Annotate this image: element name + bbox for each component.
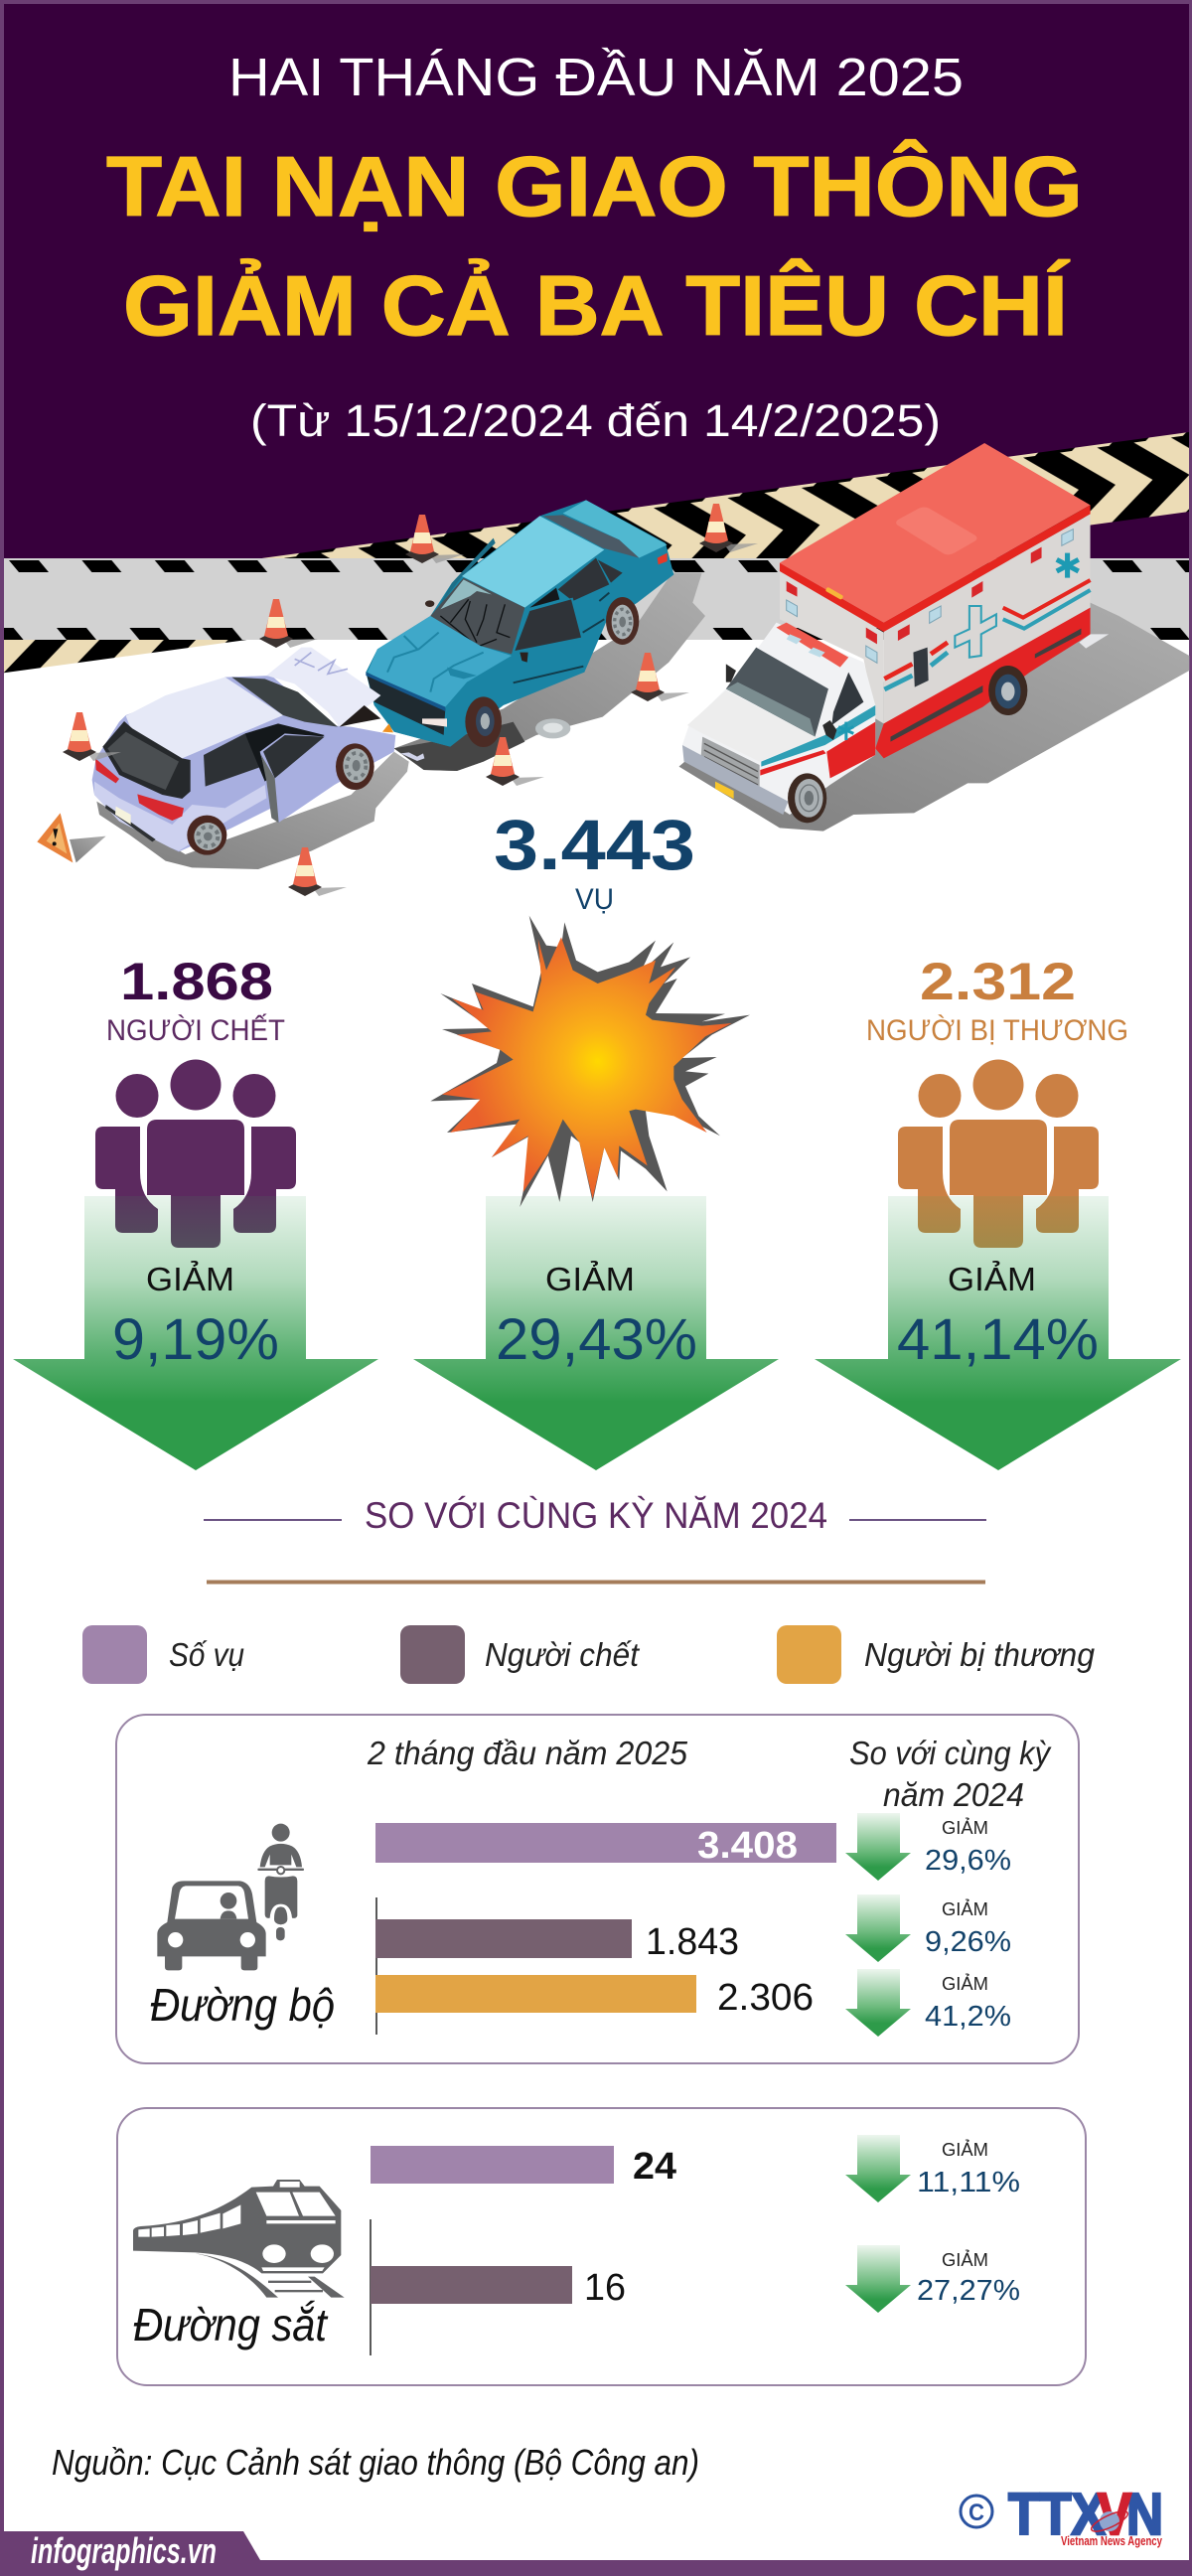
logo: TTXVN: N bbox=[1126, 2482, 1163, 2547]
legend: Người chết bbox=[485, 1636, 641, 1673]
traffic cones behind cars bbox=[259, 504, 758, 648]
footer: infographics.vn bbox=[31, 2530, 217, 2571]
icon: car and scooter bbox=[157, 1824, 304, 1970]
logo: TTXVN bbox=[961, 2482, 1163, 2548]
bar: road injured bbox=[375, 1975, 814, 2019]
arrow labels: deaths bbox=[112, 1261, 279, 1372]
header banner bbox=[4, 4, 1189, 558]
stat: injured count: 2.312 bbox=[920, 953, 1076, 1011]
traffic cones in front bbox=[63, 653, 689, 896]
arrow labels: deaths: 9,19% bbox=[112, 1307, 279, 1372]
stat: injured count: NGƯỜI BỊ THƯƠNG bbox=[866, 1014, 1128, 1047]
footer bbox=[0, 2530, 1192, 2576]
legend: Người bị thương bbox=[864, 1636, 1096, 1673]
logo: TTXVN: TTX bbox=[1008, 2482, 1106, 2547]
change: road accidents: 29,6% bbox=[925, 1845, 1011, 1877]
stat: accidents count: 3.443 bbox=[494, 807, 695, 885]
legend bbox=[82, 1625, 1096, 1684]
title: main heading: TAI NẠN GIAO THÔNG bbox=[106, 139, 1083, 234]
icon: train bbox=[133, 2180, 345, 2298]
bar: road injured: 2.306 bbox=[717, 1977, 814, 2019]
change: road deaths: 9,26% bbox=[925, 1926, 1011, 1958]
illustration: blue car bbox=[366, 500, 705, 771]
column headers bbox=[367, 1735, 1052, 1813]
stat: accidents count bbox=[494, 807, 695, 916]
change: road accidents bbox=[845, 1813, 1011, 1881]
comparison heading: SO VỚI CÙNG KỲ NĂM 2024 bbox=[365, 1495, 827, 1536]
column headers: 2 tháng đầu năm 2025 bbox=[367, 1735, 688, 1771]
change: road deaths: GIẢM bbox=[942, 1898, 988, 1919]
title: main heading: GIẢM CẢ BA TIÊU CHÍ bbox=[123, 258, 1071, 354]
change: road deaths bbox=[845, 1894, 1011, 1962]
change: road injured: 41,2% bbox=[925, 2001, 1011, 2033]
panel: rail bbox=[117, 2108, 1086, 2385]
logo: TTXVN: V bbox=[1098, 2482, 1131, 2547]
bar: rail deaths: 16 bbox=[584, 2267, 626, 2309]
stat: accidents count: VỤ bbox=[575, 883, 614, 916]
icon: people, injured bbox=[898, 1059, 1099, 1248]
arrow labels: injured: 41,14% bbox=[897, 1307, 1099, 1372]
legend: Số vụ bbox=[169, 1636, 244, 1673]
illustration: white car bbox=[37, 648, 409, 869]
change: rail deaths bbox=[845, 2245, 1020, 2313]
arrow labels: accidents: GIẢM bbox=[545, 1261, 635, 1297]
arrow labels: injured: GIẢM bbox=[948, 1261, 1036, 1297]
stat: deaths count: NGƯỜI CHẾT bbox=[106, 1013, 285, 1047]
bar: road deaths bbox=[375, 1919, 739, 1963]
change: rail deaths: GIẢM bbox=[942, 2249, 988, 2270]
label: road: Đường bộ bbox=[150, 1979, 335, 2031]
arrow labels: accidents: 29,43% bbox=[496, 1307, 697, 1372]
change: rail deaths: 27,27% bbox=[917, 2275, 1020, 2307]
chevron tape bbox=[4, 432, 1189, 673]
icon: people, deaths bbox=[95, 1059, 296, 1248]
arrow: accidents decrease bbox=[413, 1196, 779, 1470]
change: rail accidents: GIẢM bbox=[942, 2139, 988, 2160]
bar: road accidents: 3.408 bbox=[697, 1825, 798, 1867]
source: Nguồn: Cục Cảnh sát giao thông (Bộ Công an) bbox=[52, 2442, 699, 2483]
bar: road accidents bbox=[375, 1823, 836, 1867]
column headers: năm 2024 bbox=[883, 1776, 1024, 1813]
change: road injured bbox=[845, 1969, 1011, 2037]
stat: deaths count: 1.868 bbox=[120, 953, 273, 1011]
arrow: injured decrease bbox=[815, 1196, 1181, 1470]
bar: rail deaths bbox=[371, 2266, 626, 2309]
panel: road bbox=[116, 1715, 1079, 2063]
arrow labels: accidents bbox=[496, 1261, 697, 1372]
title: main heading bbox=[106, 139, 1083, 354]
label: rail: Đường sắt bbox=[133, 2299, 329, 2350]
change: road accidents: GIẢM bbox=[942, 1817, 988, 1838]
subtitle: date range: (Từ 15/12/2024 đến 14/2/2025) bbox=[250, 395, 941, 446]
change: road injured: GIẢM bbox=[942, 1973, 988, 1994]
logo: TTXVN: C bbox=[968, 2500, 984, 2526]
stat: deaths count bbox=[106, 953, 285, 1047]
stat: injured count bbox=[866, 953, 1128, 1047]
title: period heading: HAI THÁNG ĐẦU NĂM 2025 bbox=[228, 48, 964, 107]
bar: rail accidents: 24 bbox=[633, 2146, 676, 2188]
illustration: ambulance bbox=[679, 443, 1189, 832]
bar: road deaths: 1.843 bbox=[646, 1921, 739, 1963]
change: rail accidents bbox=[845, 2135, 1020, 2202]
change: rail accidents: 11,11% bbox=[917, 2167, 1020, 2198]
icon: explosion bbox=[430, 916, 750, 1207]
column headers: So với cùng kỳ bbox=[849, 1735, 1052, 1771]
arrow labels: injured bbox=[897, 1261, 1099, 1372]
bar: rail accidents bbox=[371, 2146, 676, 2188]
arrow: deaths decrease bbox=[13, 1196, 378, 1470]
road strip bbox=[4, 558, 1189, 640]
arrow labels: deaths: GIẢM bbox=[146, 1261, 234, 1297]
